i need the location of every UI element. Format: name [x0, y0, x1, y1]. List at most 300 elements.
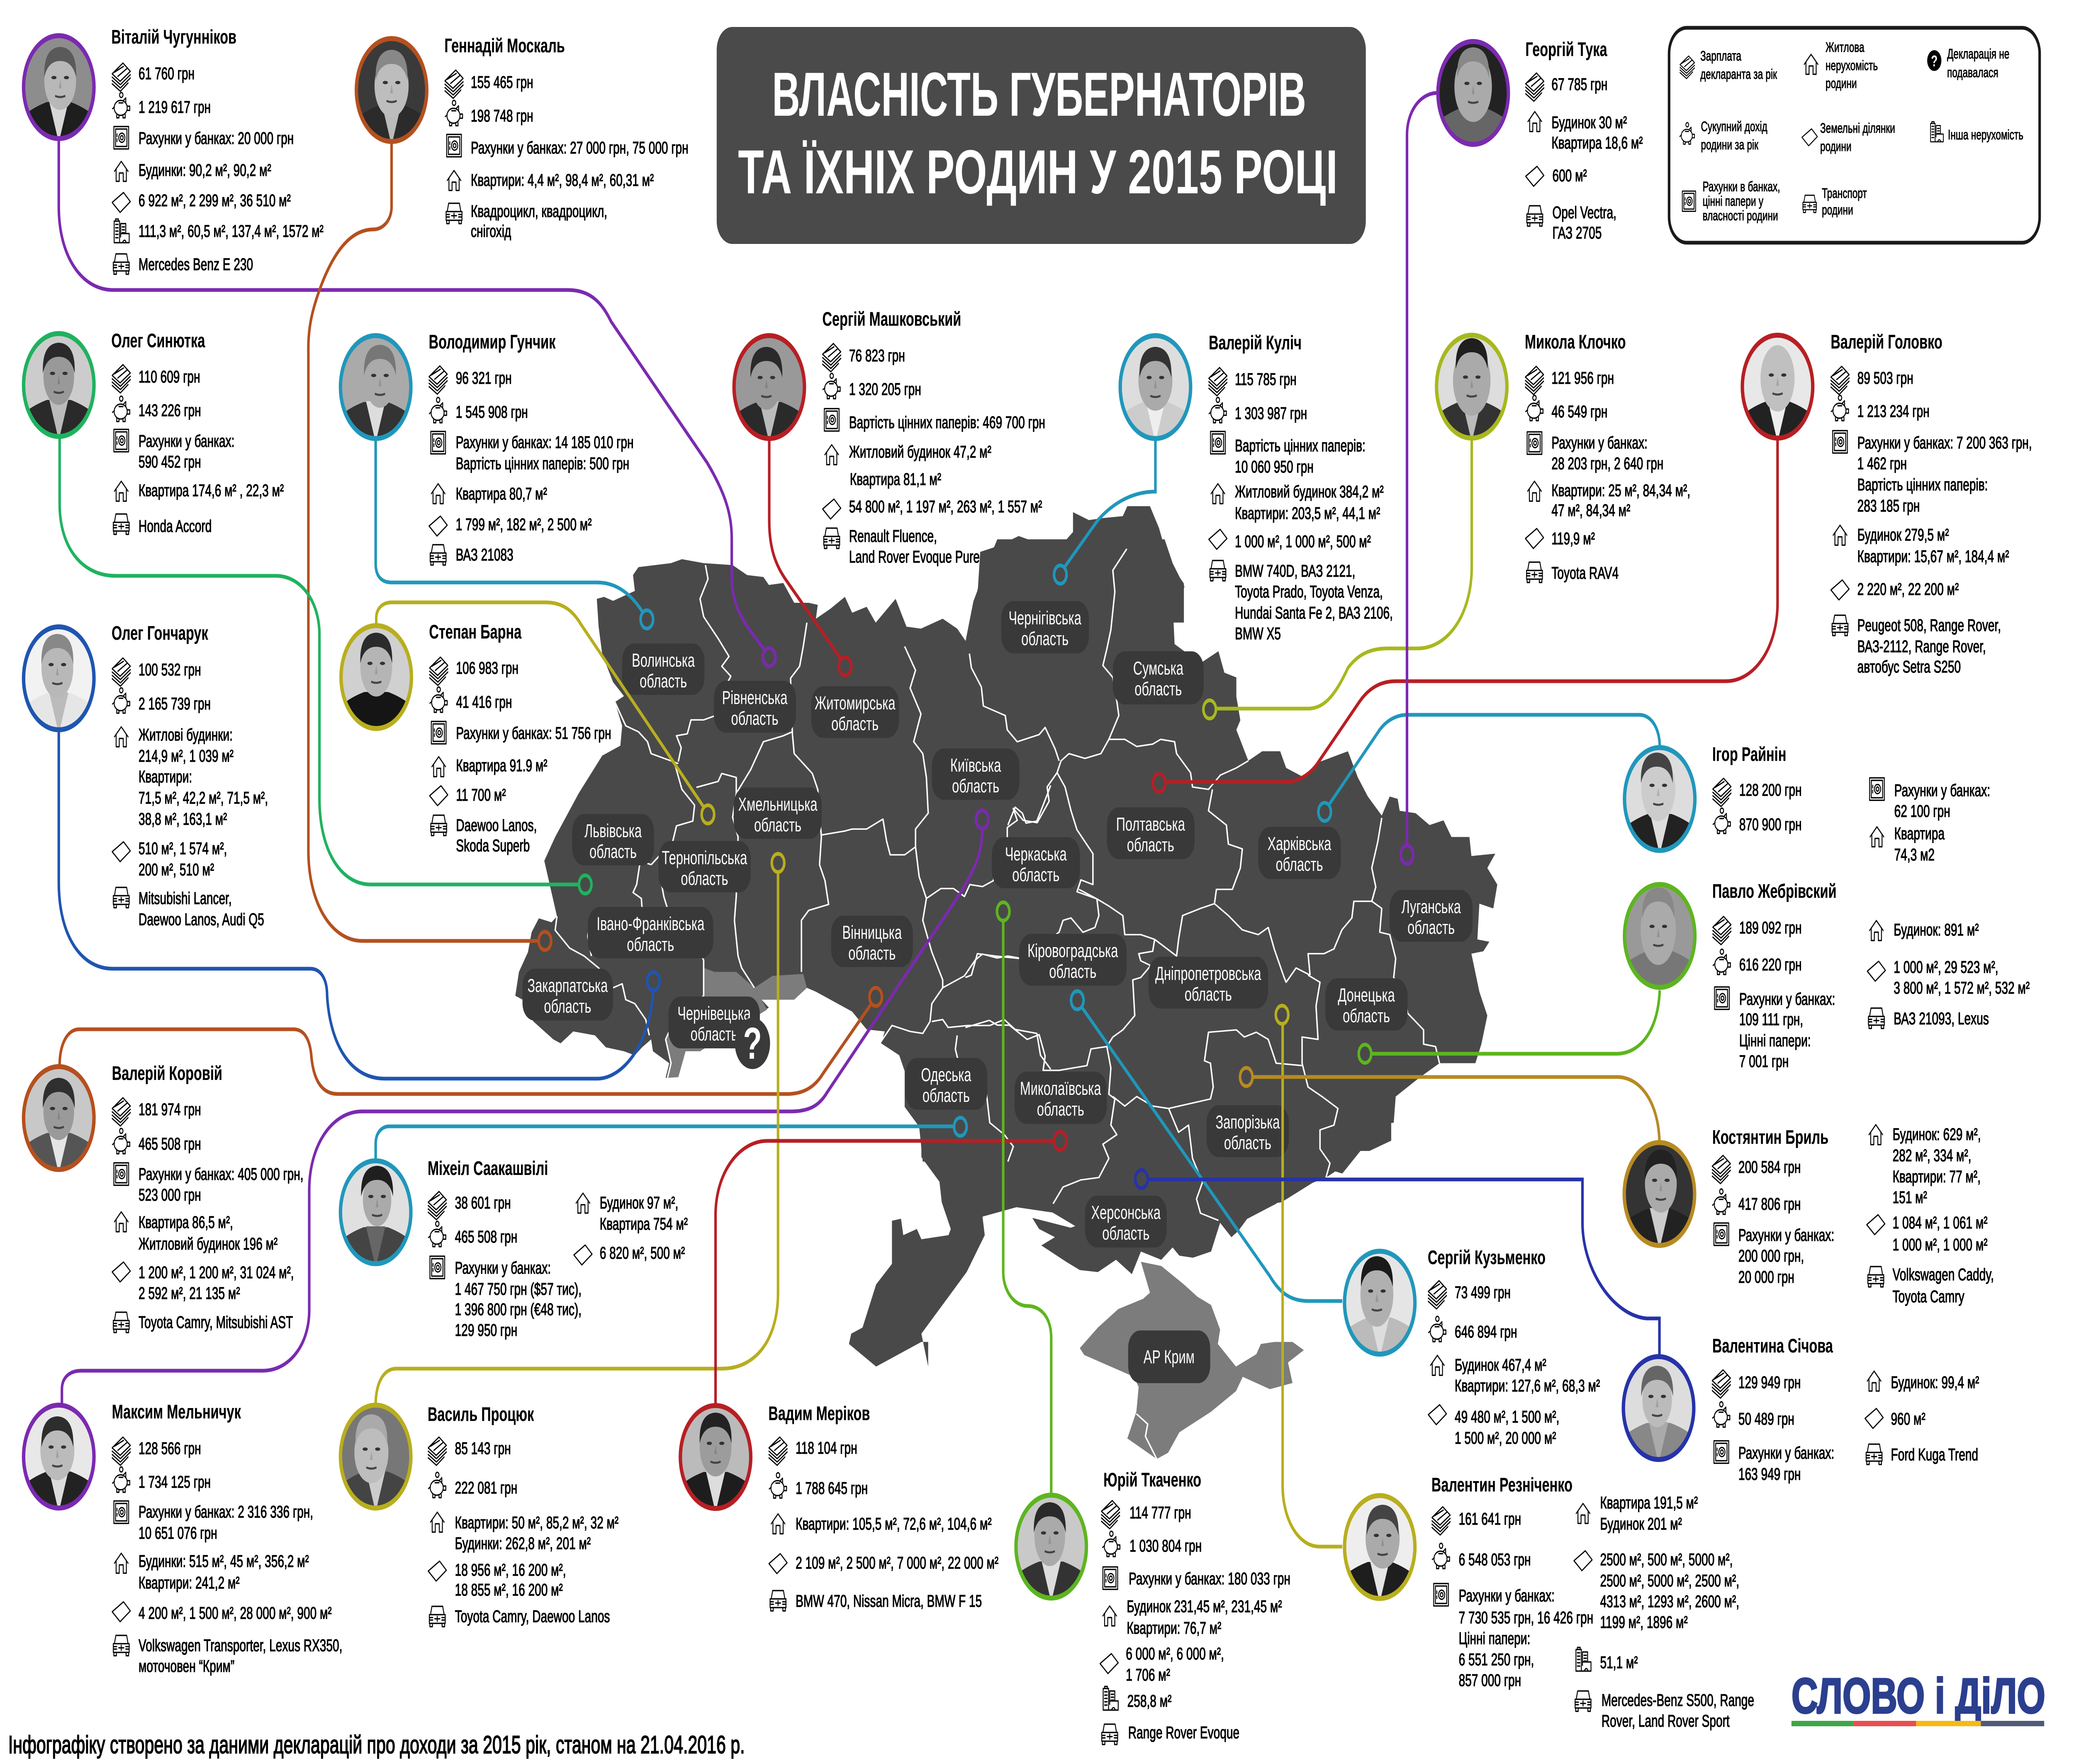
- row: other property: [1576, 1647, 1638, 1672]
- row: salary: [428, 1191, 511, 1220]
- label: Mykolaiv: область: [1037, 1099, 1084, 1120]
- connector: Holovko to Poltava: [1153, 440, 1777, 792]
- label: Kharkiv: область: [1276, 854, 1323, 875]
- label: Rivne: область: [731, 708, 779, 729]
- label: Zaporizhzhia: Запорізька: [1215, 1112, 1280, 1133]
- title: [717, 27, 1366, 244]
- panel: Головко: [1742, 331, 2032, 676]
- row: income: 616 220 грн: [1739, 955, 1801, 974]
- row: housing: Квартири: 4,4 м², 98,4 м², 60,31 м²: [471, 171, 654, 190]
- name: Сергій Машковський: [822, 308, 961, 330]
- connector: Kulich to Chernihiv: [1054, 440, 1155, 584]
- row: salary: 118 104 грн: [796, 1439, 857, 1457]
- row: housing: Квартира 91.9 м²: [456, 756, 548, 775]
- row: bank: 6 551 250 грн,: [1459, 1650, 1534, 1669]
- label: Vinnytsia: [831, 916, 913, 967]
- photo: Бриль: [1624, 1143, 1694, 1245]
- label: Chernivtsi: область: [691, 1024, 738, 1045]
- name: Вадим Меріков: [768, 1402, 870, 1425]
- row: land: 510 м², 1 574 м²,: [139, 839, 227, 858]
- row: salary: 128 200 грн: [1739, 781, 1801, 799]
- row: income: [1432, 1543, 1531, 1569]
- icon: question mark, Chernivtsi declaration not filed: [735, 1018, 770, 1069]
- row: transport: ВАЗ 21093, Lexus: [1894, 1009, 1989, 1028]
- row: housing: Квартира 81,1 м²: [850, 470, 941, 489]
- row: transport: Volkswagen Transporter, Lexus RX350,: [139, 1636, 342, 1655]
- photo: Головко: [1742, 335, 1813, 438]
- row: salary: [112, 1098, 201, 1126]
- row: salary: [823, 344, 905, 372]
- row: securities: Вартість цінних паперів:: [1235, 436, 1366, 455]
- row: bank: 163 949 грн: [1738, 1465, 1801, 1484]
- legend: family income: [1680, 119, 1767, 152]
- row: bank: 7 730 535 грн, 16 426 грн: [1459, 1608, 1593, 1627]
- row: housing: Квартира: [1894, 824, 1945, 843]
- row: housing: Квартири: 15,67 м², 184,4 м²: [1857, 547, 2009, 566]
- row: bank: 1 396 800 грн (€48 тис),: [455, 1300, 582, 1319]
- row: bank: 200 000 грн,: [1738, 1247, 1804, 1265]
- row: housing: [825, 443, 991, 489]
- row: bank: Рахунки у банках: 20 000 грн: [139, 129, 294, 148]
- label: Ternopil: Тернопільська: [662, 848, 747, 869]
- connector: Melnychuk to Kyiv: [62, 810, 988, 1403]
- row: bank: Рахунки у банках: 2 316 336 грн,: [139, 1503, 313, 1521]
- label: Ivano-Frankivsk: область: [627, 934, 674, 955]
- photo: Барна: [341, 626, 411, 729]
- row: bank: Рахунки у банках:: [1894, 781, 1990, 800]
- row: transport: Daewoo Lanos, Audi Q5: [139, 910, 264, 929]
- row: bank: [1870, 778, 1990, 821]
- oblast labels: [523, 601, 1473, 1383]
- row: bank: 1 467 750 грн ($57 тис),: [455, 1280, 582, 1299]
- row: bank: 857 000 грн: [1459, 1671, 1521, 1690]
- panel: Барна: [341, 621, 611, 855]
- row: bank: 283 185 грн: [1857, 497, 1920, 515]
- row: bank: 1 462 грн: [1857, 454, 1907, 473]
- row: housing: Квартири: 76,7 м²: [1127, 1619, 1222, 1637]
- row: income: 1 219 617 грн: [139, 98, 211, 117]
- row: income: [428, 1472, 517, 1498]
- row: housing: [1576, 1494, 1698, 1533]
- row: salary: 38 601 грн: [455, 1194, 511, 1212]
- row: housing: Будинки: 515 м², 45 м², 356,2 м²: [139, 1552, 309, 1571]
- row: salary: 129 949 грн: [1738, 1373, 1801, 1392]
- label: Cherkasy: область: [1012, 865, 1059, 886]
- row: salary: [428, 1437, 511, 1465]
- row: land: [1428, 1405, 1559, 1447]
- row: transport: [431, 815, 537, 855]
- row: income: [112, 1128, 201, 1154]
- row: housing: [1528, 112, 1643, 152]
- row: income: 417 806 грн: [1738, 1195, 1801, 1213]
- row: bank: Вартість цінних паперів:: [1857, 475, 1988, 494]
- row: land: [112, 839, 227, 879]
- row: housing: Будинок 30 м²: [1551, 113, 1627, 132]
- row: housing: Будинок 467,4 м²: [1455, 1356, 1546, 1374]
- map landmass: west: [515, 559, 1051, 1162]
- row: salary: 85 143 грн: [455, 1439, 511, 1458]
- row: bank: Рахунки у банках: 7 200 363 грн,: [1857, 434, 2032, 452]
- panel: Чугунніков: [24, 26, 324, 274]
- connector: Rainin to Kharkiv: [1318, 715, 1660, 821]
- label: Rivne: [714, 681, 796, 733]
- row: housing: Житловий будинок 384,2 м²: [1235, 482, 1384, 501]
- legend: no declaration: ?: [1931, 52, 1938, 70]
- row: income: [1429, 1316, 1517, 1342]
- footer note: Інфографіку створено за даними декларацій про доходи за 2015 рік, станом на 21.04.2016 р.: [8, 1730, 745, 1759]
- connector: Bryl to Zaporizhzhia: [1240, 1068, 1660, 1141]
- row: salary: [1712, 1370, 1801, 1398]
- photo: Гончарук: [24, 627, 94, 730]
- row: transport: Mercedes Benz E 230: [139, 255, 253, 274]
- row: transport: Opel Vectra,: [1552, 203, 1616, 222]
- panel: Синютка: [24, 329, 284, 536]
- row: securities: 10 060 950 грн: [1235, 458, 1314, 476]
- row: income: [429, 397, 528, 423]
- row: income: [112, 93, 211, 118]
- label: Rivne: Рівненська: [722, 687, 788, 709]
- label: Kyiv: область: [952, 776, 999, 797]
- row: housing: 214,9 м², 1 039 м²: [139, 747, 234, 765]
- row: transport: Hundai Santa Fe 2, ВАЗ 2106,: [1235, 604, 1393, 622]
- panel: Жебрівский: [1624, 880, 2030, 1071]
- photo: Гунчик: [341, 336, 411, 439]
- row: housing: Квартира 80,7 м²: [456, 485, 547, 503]
- row: salary: [112, 365, 200, 393]
- row: salary: [430, 657, 518, 685]
- legend: bank accounts: цінні папери у: [1703, 193, 1764, 209]
- row: salary: [445, 70, 533, 98]
- row: bank: [1714, 987, 1835, 1071]
- row: land: 2 109 м², 2 500 м², 7 000 м², 22 000 м²: [796, 1554, 998, 1572]
- label: Zakarpattia: Закарпатська: [528, 975, 608, 997]
- connector: Mashkovskyi to Zhytomyr: [769, 441, 851, 675]
- name: Геннадій Москаль: [444, 34, 565, 57]
- label: Kirovohrad: область: [1049, 961, 1096, 982]
- name: Павло Жебрівский: [1712, 880, 1836, 902]
- row: salary: [1713, 778, 1801, 806]
- row: housing: Квартира 174,6 м² , 22,3 м²: [139, 481, 284, 500]
- name: Валерій Головко: [1831, 331, 1943, 353]
- row: salary: [112, 63, 195, 91]
- row: land: [1867, 1213, 1988, 1254]
- connector: Zhebrivskyi to Donetsk: [1359, 990, 1660, 1063]
- row: salary: 100 532 грн: [139, 660, 201, 679]
- row: bank: Рахунки у банках:: [1739, 990, 1835, 1009]
- row: land: [1865, 1408, 1926, 1428]
- row: bank: Рахунки у банках: 51 756 грн: [456, 724, 611, 743]
- row: bank: Цінні папери:: [1459, 1629, 1530, 1648]
- panel: Мельничук: [24, 1401, 342, 1676]
- row: salary: 161 641 грн: [1459, 1510, 1521, 1528]
- row: salary: 110 609 грн: [139, 368, 200, 386]
- row: transport: [113, 514, 212, 536]
- row: transport: Peugeot 508, Range Rover,: [1857, 616, 2001, 635]
- row: income: [1831, 395, 1930, 421]
- row: land: 1 500 м², 20 000 м²: [1455, 1429, 1556, 1447]
- connector: Sichova to Kherson: [1135, 1170, 1660, 1359]
- panel: Райнін: [1624, 743, 1990, 864]
- row: housing: Будинок: 891 м²: [1894, 921, 1979, 939]
- row: land: 1 200 м², 1 200 м², 31 024 м²,: [139, 1263, 294, 1282]
- row: housing: [1211, 482, 1384, 523]
- row: salary: [1432, 1507, 1521, 1535]
- row: bank: [1527, 432, 1663, 473]
- photo: Коровій: [24, 1067, 94, 1170]
- row: housing: Квартира 18,6 м²: [1551, 134, 1643, 152]
- row: income: [1713, 1189, 1801, 1214]
- legend: other property: Інша нерухомість: [1948, 127, 2023, 142]
- row: land: [1525, 529, 1595, 548]
- panel: Куліч: [1120, 331, 1393, 643]
- row: transport: Toyota Camry, Mitsubishi AST: [139, 1313, 293, 1332]
- label: Kyiv: [932, 748, 1020, 800]
- label: Zaporizhzhia: область: [1224, 1133, 1271, 1154]
- row: land: [1100, 1645, 1224, 1684]
- label: Poltava: Полтавська: [1116, 814, 1185, 835]
- row: transport: BMW X5: [1235, 624, 1281, 643]
- row: housing: [1870, 824, 1945, 864]
- row: salary: 73 499 грн: [1455, 1283, 1511, 1302]
- row: land: [428, 1561, 566, 1599]
- row: salary: 200 584 грн: [1738, 1158, 1801, 1177]
- row: salary: 106 983 грн: [456, 659, 518, 677]
- legend: transport: [1803, 185, 1867, 217]
- label: Crimea: [1128, 1330, 1210, 1383]
- row: land: 4 200 м², 1 500 м², 28 000 м², 900 м²: [139, 1604, 332, 1623]
- row: income: 1 320 205 грн: [849, 380, 921, 399]
- photo: Синютка: [24, 334, 94, 436]
- row: bank: Рахунки у банках:: [1551, 434, 1648, 452]
- row: housing: Житловий будинок 47,2 м²: [849, 443, 991, 461]
- legend: salary: [1680, 48, 1777, 82]
- row: salary: [1831, 366, 1913, 395]
- label: Dnipropetrovsk: Дніпропетровська: [1155, 963, 1261, 984]
- row: transport: [1575, 1691, 1754, 1730]
- row: land: 2500 м², 5000 м², 2500 м²,: [1600, 1572, 1739, 1590]
- row: bank: Рахунки у банках:: [139, 432, 234, 451]
- row: housing: [1833, 525, 2009, 566]
- row: housing: 282 м², 334 м²,: [1893, 1146, 1971, 1165]
- label: Chernihiv: [1001, 601, 1089, 653]
- row: transport: [824, 527, 980, 566]
- label: Luhansk: [1390, 890, 1473, 942]
- label: Odesa: [905, 1058, 987, 1110]
- row: transport: Honda Accord: [139, 517, 212, 536]
- row: housing: Квартири: 50 м², 85,2 м², 32 м²: [455, 1513, 618, 1532]
- row: income: 1 734 125 грн: [139, 1473, 211, 1491]
- row: transport: [1527, 203, 1616, 242]
- legend: housing: [1804, 39, 1878, 91]
- row: housing: 71,5 м², 42,2 м², 71,5 м²,: [139, 789, 268, 807]
- connector: Reznichenko to Dnipropetrovsk: [1276, 1006, 1342, 1547]
- row: securities: Вартість цінних паперів: 469 700 грн: [849, 413, 1045, 432]
- row: housing: Житлові будинки:: [139, 726, 233, 744]
- label: Ivano-Frankivsk: [588, 907, 713, 958]
- row: income: [445, 100, 533, 126]
- row: housing: Квартири: 105,5 м², 72,6 м², 104,6 м²: [796, 1515, 992, 1533]
- row: salary: [769, 1437, 857, 1465]
- row: income: [112, 396, 201, 422]
- row: transport: BMW 740D, ВАЗ 2121,: [1235, 562, 1355, 580]
- panel: Кузьменко: [1344, 1246, 1600, 1447]
- name: Валерій Куліч: [1209, 331, 1302, 354]
- oblast borders: west: [555, 565, 1051, 1162]
- row: bank: Рахунки у банках:: [1738, 1226, 1834, 1245]
- photo: Чугунніков: [24, 36, 94, 139]
- photo: Процюк: [341, 1405, 411, 1508]
- row: bank: [1434, 1584, 1593, 1690]
- row: land: 960 м²: [1891, 1410, 1926, 1428]
- label: Kharkiv: [1258, 827, 1341, 879]
- row: housing: Будинки: 90,2 м², 90,2 м²: [139, 161, 271, 180]
- row: transport: [1832, 615, 2001, 676]
- label: Lviv: Львівська: [584, 821, 642, 842]
- panel: Тука: [1438, 38, 1643, 242]
- label: Chernivtsi: [668, 997, 760, 1048]
- row: bank: Рахунки у банках:: [1459, 1586, 1555, 1605]
- panel: Клочко: [1436, 331, 1690, 582]
- name: Микола Клочко: [1525, 331, 1626, 353]
- name: Валентин Резніченко: [1431, 1474, 1573, 1496]
- connector: Chuhunnikov to Rivne: [59, 141, 776, 666]
- row: income: [428, 1221, 517, 1247]
- row: salary: 67 785 грн: [1551, 75, 1607, 94]
- row: housing: Квартира 191,5 м²: [1600, 1494, 1698, 1512]
- Chernivtsi oblast (no declaration): [666, 968, 807, 1078]
- row: housing: Будинок 279,5 м²: [1857, 526, 1949, 544]
- row: land: [1867, 958, 2030, 997]
- label: Poltava: область: [1127, 835, 1174, 856]
- row: bank: [114, 1163, 304, 1204]
- row: transport: [113, 1635, 342, 1676]
- row: housing: Квартири: 25 м², 84,34 м²,: [1551, 481, 1690, 500]
- label: Chernihiv: Чернігівська: [1008, 608, 1081, 629]
- photo: Тука: [1438, 41, 1508, 144]
- photo: Куліч: [1120, 336, 1190, 439]
- label: Zakarpattia: [523, 969, 613, 1021]
- photo: Січова: [1624, 1357, 1694, 1459]
- label: Zhytomyr: [811, 686, 899, 738]
- label: Kyiv: Київська: [950, 755, 1001, 776]
- row: land: [1526, 166, 1587, 186]
- panel: Саакашвілі: [341, 1157, 688, 1340]
- row: bank: Рахунки у банках: 27 000 грн, 75 000 грн: [471, 139, 689, 157]
- row: bank: 10 651 076 грн: [139, 1524, 217, 1542]
- name: Георгій Тука: [1525, 38, 1607, 61]
- row: income: 1 213 234 грн: [1857, 402, 1930, 421]
- connector: Saakashvili to Odesa: [376, 1118, 966, 1160]
- row: salary: 181 974 грн: [139, 1100, 201, 1119]
- label: Volyn: Волинська: [632, 650, 695, 671]
- row: housing: Квартири:: [139, 767, 192, 786]
- row: income: [1713, 808, 1801, 834]
- row: land: 1 000 м², 1 000 м², 500 м²: [1235, 532, 1371, 551]
- row: salary: [112, 658, 201, 686]
- label: Chernivtsi: Чернівецька: [677, 1003, 751, 1024]
- row: land: 1 799 м², 182 м², 2 500 м²: [456, 515, 592, 534]
- connector: Tuka to Luhansk: [1401, 93, 1438, 864]
- row: bank: [1714, 1223, 1834, 1286]
- label: Lviv: [572, 814, 654, 865]
- row: salary: 128 566 грн: [139, 1439, 201, 1458]
- row: income: 1 303 987 грн: [1235, 404, 1307, 423]
- row: housing: Будинок: 99,4 м²: [1891, 1373, 1979, 1392]
- row: land: 6 922 м², 2 299 м², 36 510 м²: [139, 191, 291, 210]
- row: income: [1103, 1531, 1202, 1557]
- map landmass: south: [849, 1120, 1391, 1367]
- row: land: 49 480 м², 1 500 м²,: [1455, 1408, 1559, 1426]
- row: transport: Land Rover Evoque Pure: [849, 548, 980, 566]
- row: income: 870 900 грн: [1739, 815, 1801, 834]
- legend: housing: Житлова: [1826, 39, 1865, 55]
- row: land: 2 592 м², 21 135 м²: [139, 1284, 240, 1303]
- row: housing: [114, 1552, 309, 1592]
- legend: salary: Зарплата: [1700, 48, 1741, 63]
- legend: transport: родини: [1822, 202, 1853, 217]
- row: income: 2 165 739 грн: [139, 694, 211, 713]
- panel: Ткаченко: [1016, 1469, 1290, 1745]
- row: bank: [1714, 1441, 1834, 1484]
- row: salary: 76 823 грн: [849, 346, 905, 365]
- label: Kherson: [1085, 1196, 1167, 1247]
- row: bank: 590 452 грн: [139, 453, 201, 471]
- legend: housing: родини: [1826, 76, 1857, 91]
- row: housing: [431, 1512, 618, 1553]
- legend: no declaration: [1927, 46, 2009, 80]
- title: ТА ЇХНІХ РОДИН У 2015 РОЦІ: [738, 138, 1338, 207]
- row: transport: ГАЗ 2705: [1552, 224, 1602, 242]
- connector: Syniutka to Lviv: [60, 436, 592, 894]
- label: Lviv: область: [589, 841, 637, 863]
- row: housing: [1528, 481, 1690, 520]
- row: bank: 7 001 грн: [1739, 1052, 1789, 1071]
- panel: Процюк: [341, 1403, 618, 1627]
- panel: Січова: [1624, 1335, 1979, 1484]
- row: bank: Рахунки у банках: 180 033 грн: [1129, 1569, 1290, 1588]
- row: land: 1 084 м², 1 061 м²: [1893, 1213, 1988, 1232]
- row: transport: [1868, 1265, 1994, 1306]
- row: income: [1526, 395, 1607, 421]
- photo: Машковський: [734, 336, 804, 439]
- label: Odesa: Одеська: [921, 1065, 971, 1086]
- row: salary: [1526, 73, 1607, 101]
- label: Volyn: область: [640, 671, 687, 692]
- AR Crimea: [1080, 1262, 1304, 1459]
- row: housing: Квартира 754 м²: [600, 1215, 688, 1233]
- row: salary: 189 092 грн: [1739, 919, 1801, 937]
- row: transport: Skoda Superb: [456, 836, 530, 855]
- row: salary: [1712, 1155, 1801, 1184]
- label: Mykolaiv: [1015, 1072, 1107, 1124]
- row: other property: [1103, 1686, 1172, 1710]
- row: salary: 155 465 грн: [471, 73, 533, 92]
- row: housing: [114, 1212, 278, 1253]
- row: income: [769, 1473, 868, 1498]
- connector: Klochko to Sumy: [1203, 440, 1472, 719]
- label: Zaporizhzhia: [1207, 1105, 1289, 1157]
- label: Kirovohrad: Кіровоградська: [1027, 940, 1118, 962]
- row: land: 119,9 м²: [1551, 529, 1595, 548]
- map landmass: east: [965, 539, 1497, 1221]
- row: salary: [112, 1437, 201, 1465]
- row: housing: 151 м²: [1893, 1188, 1927, 1207]
- row: housing: Квартири: 203,5 м², 44,1 м²: [1235, 504, 1380, 523]
- row: land: [1574, 1550, 1739, 1632]
- label: Dnipropetrovsk: область: [1185, 984, 1232, 1005]
- row: transport: [446, 202, 607, 241]
- row: transport: Rover, Land Rover Sport: [1602, 1712, 1730, 1730]
